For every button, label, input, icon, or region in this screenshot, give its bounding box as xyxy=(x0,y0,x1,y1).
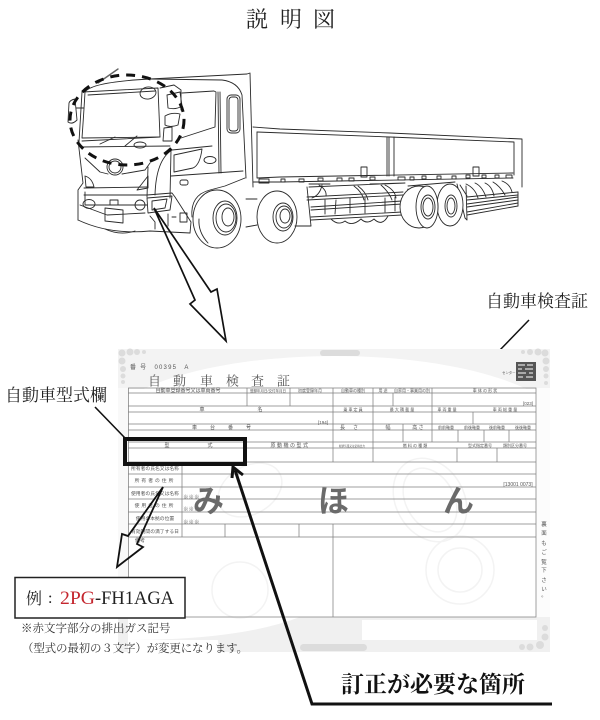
footnote: ※赤文字部分の排出ガス記号 xyxy=(21,621,171,635)
form field labels: 自動車の種別 xyxy=(341,387,365,393)
certificate serial number: 番 号 00395 A xyxy=(130,364,190,371)
sample watermark: みほん xyxy=(193,484,474,519)
certificate heading: 証 xyxy=(277,374,290,388)
form field labels: 乗 車 定 員 xyxy=(343,406,363,412)
title: 説 xyxy=(246,7,268,32)
form field labels: 使用の本拠の位置 xyxy=(136,515,174,522)
form field labels: 備考 xyxy=(135,537,145,544)
form field labels: 初度登録年月 xyxy=(298,387,322,393)
form field labels: 類別区分番号 xyxy=(503,442,527,448)
form field labels: 燃 料 の 種 類 xyxy=(403,442,427,448)
callout: example model code: 2PG xyxy=(60,588,95,609)
title xyxy=(246,7,335,32)
form field labels: 使用者の住所 xyxy=(135,502,175,509)
form field labels: 名 xyxy=(257,406,263,413)
form field labels: 幅 xyxy=(385,424,391,431)
form field labels: 使用者の氏名又は名称 xyxy=(131,490,179,497)
form field labels: 車 体 の 形 状 xyxy=(473,387,497,393)
form field labels: 車台番号 xyxy=(192,424,264,431)
form field labels: 総排気量又は定格出力 xyxy=(339,444,365,448)
form table grid xyxy=(128,388,536,617)
centre label and QR block xyxy=(502,362,536,381)
callout: example model code: : xyxy=(48,590,52,607)
side note: 裏面もご覧下さい: 覧 xyxy=(541,558,547,566)
label: 自動車検査証: 自動車検査証 xyxy=(486,292,588,311)
callout: example model code: 例 xyxy=(26,590,42,608)
form field labels: [13001 0073] xyxy=(503,482,533,488)
side note: 裏面もご覧下さい: 下 xyxy=(541,567,547,574)
form field labels: 型 xyxy=(164,442,170,449)
form field labels: [194] xyxy=(318,420,328,425)
arrow: truck to certificate xyxy=(154,208,226,341)
form field labels: 後後軸重 xyxy=(515,424,531,430)
leader line: model field label xyxy=(95,407,125,438)
truck cab xyxy=(68,69,257,233)
form field labels: 式 xyxy=(207,442,213,449)
side note: 裏面もご覧下さい: 面 xyxy=(541,530,547,537)
form field labels: 登録年月日/交付年月日 xyxy=(250,388,286,393)
form field labels: 自家用・事業用の別 xyxy=(394,387,430,393)
form field labels: 車 xyxy=(199,406,205,413)
front wheels xyxy=(193,190,297,248)
form field labels: 最 大 積 載 量 xyxy=(390,406,414,412)
cargo bed xyxy=(253,127,522,187)
form field labels xyxy=(131,387,533,544)
side note: 裏面もご覧下さい: い xyxy=(541,586,547,593)
highlight box: model field xyxy=(125,439,245,464)
label: 自動車型式欄: 自動車型式欄 xyxy=(5,386,107,405)
form field labels: 車 両 重 量 xyxy=(437,406,457,412)
form field labels: 前前軸重 xyxy=(438,424,454,430)
certificate heading: 査 xyxy=(251,374,264,388)
centre label and QR block: センター xyxy=(502,370,516,375)
callout: example model code: -FH1AGA xyxy=(95,588,174,609)
side guard rails and suspension xyxy=(295,181,518,226)
footnote: （型式の最初の３文字）が変更になります。 xyxy=(22,641,248,655)
certificate heading: 車 xyxy=(200,374,213,388)
form field labels: ※※※ xyxy=(183,506,200,513)
callout arrow: correction location xyxy=(232,467,552,704)
sample watermark: みほん: み xyxy=(193,484,224,519)
side note: 裏面もご覧下さい: さ xyxy=(541,577,547,584)
side note: 裏面もご覧下さい: ご xyxy=(541,548,547,556)
truck illustration xyxy=(68,69,522,248)
leader line: certificate label xyxy=(498,320,529,352)
label: 訂正が必要な箇所: 訂正が必要な箇所 xyxy=(341,672,525,697)
side note: 裏面もご覧下さい: 裏 xyxy=(541,520,547,528)
certificate heading: 自 xyxy=(148,374,161,388)
form field labels: 用 途 xyxy=(378,388,388,393)
form field labels: 所有者の氏名又は名称 xyxy=(131,465,179,472)
footnote xyxy=(21,621,248,655)
form field labels: 所有者の住所 xyxy=(135,477,175,484)
form field labels: 前後軸重 xyxy=(464,424,480,430)
side note: 裏面もご覧下さい: 。 xyxy=(541,593,547,599)
certificate background pattern xyxy=(103,348,567,654)
title: 図 xyxy=(313,7,335,32)
form field labels: 車 両 総 重 量 xyxy=(493,406,517,412)
sample watermark: みほん: ん xyxy=(443,484,474,519)
vehicle inspection certificate xyxy=(103,348,567,654)
form field labels: ※※※ xyxy=(183,494,200,501)
form field labels: 自動車登録番号又は車両番号 xyxy=(155,387,221,394)
form field labels: 高 さ xyxy=(412,424,424,431)
form field labels: 有効期間の満了する日 xyxy=(131,528,179,535)
callout: example model code xyxy=(15,578,185,618)
sample watermark: みほん: ほ xyxy=(318,484,349,519)
form field labels: 型式指定番号 xyxy=(468,442,492,448)
certificate heading: 動 xyxy=(173,374,186,388)
form field labels: ※※※ xyxy=(183,519,200,526)
side note: 裏面もご覧下さい xyxy=(541,520,547,599)
form field labels: 後前軸重 xyxy=(489,424,505,430)
form field labels: 原動機の型式 xyxy=(270,442,310,449)
side note: 裏面もご覧下さい: も xyxy=(541,540,547,547)
rear wheels xyxy=(400,184,463,228)
certificate heading xyxy=(148,374,290,388)
dashed circle marking windshield area xyxy=(70,75,184,165)
certificate heading: 検 xyxy=(226,374,239,388)
title: 明 xyxy=(280,7,302,32)
arrow: model field to example xyxy=(117,487,163,567)
form field labels: 長さ xyxy=(340,424,366,431)
form field labels: [023] xyxy=(523,401,533,406)
